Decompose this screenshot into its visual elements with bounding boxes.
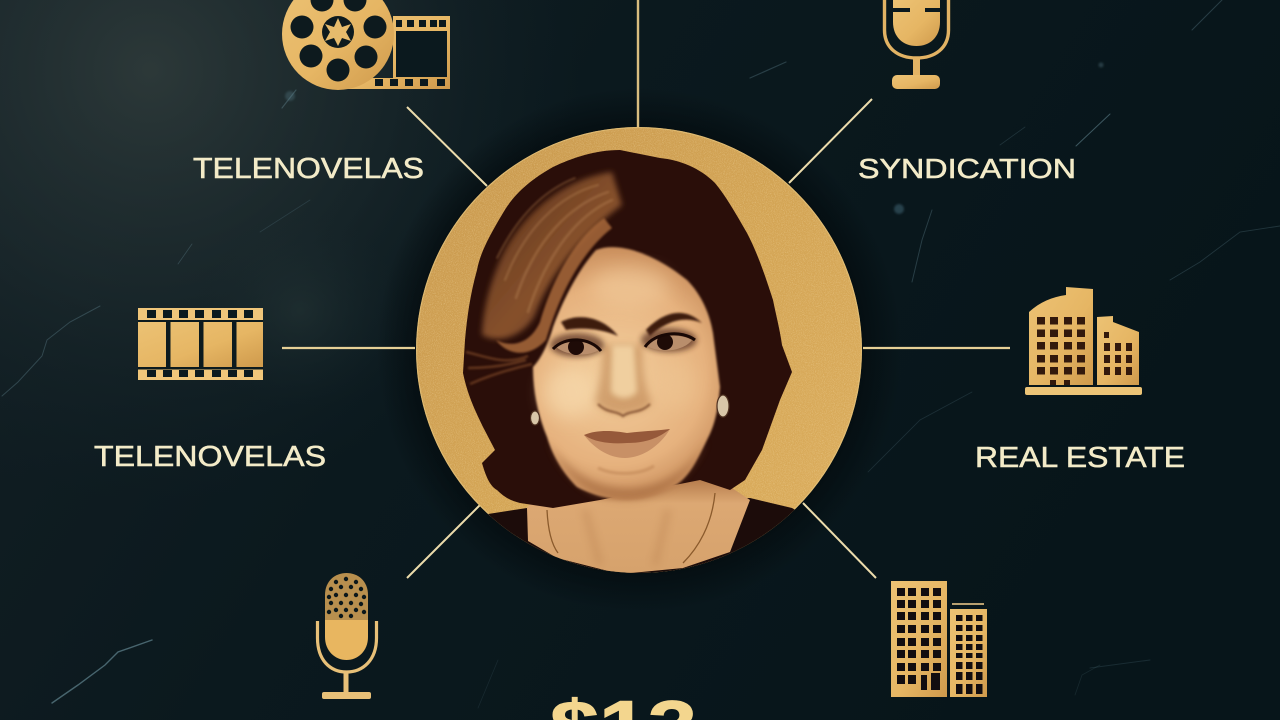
label: real estate: REAL ESTATE [975, 442, 1185, 474]
icon: office buildings bottom [891, 581, 987, 697]
nose [595, 345, 652, 416]
connector lines [282, 0, 1010, 578]
icon: real estate buildings right [1025, 287, 1142, 395]
central portrait medallion [416, 127, 862, 590]
fringe highlight and curl [496, 218, 612, 353]
portrait of a smiling woman with brown hair [463, 150, 794, 573]
neck and chest [527, 480, 750, 573]
icon: microphone top [884, 0, 948, 89]
face [533, 247, 720, 500]
earrings [530, 395, 729, 425]
icon: film reel with strip [282, 0, 450, 90]
dark top [488, 498, 794, 573]
label: telenovelas top: TELENOVELAS [193, 153, 424, 185]
hair mass [463, 150, 792, 508]
cheek and forehead light [544, 366, 596, 418]
eyes [550, 328, 697, 357]
label: syndication: SYNDICATION [858, 153, 1076, 184]
hair warm highlight swath [482, 172, 622, 339]
icon: film strip [138, 308, 263, 380]
icon: microphone bottom [318, 573, 376, 699]
necklace [547, 493, 715, 563]
label: telenovelas left: TELENOVELAS [94, 441, 326, 473]
hair strands [497, 178, 612, 312]
smile [584, 429, 670, 473]
jaw shadow [555, 452, 702, 503]
gold disc [416, 127, 862, 573]
eyebrows [561, 313, 702, 336]
